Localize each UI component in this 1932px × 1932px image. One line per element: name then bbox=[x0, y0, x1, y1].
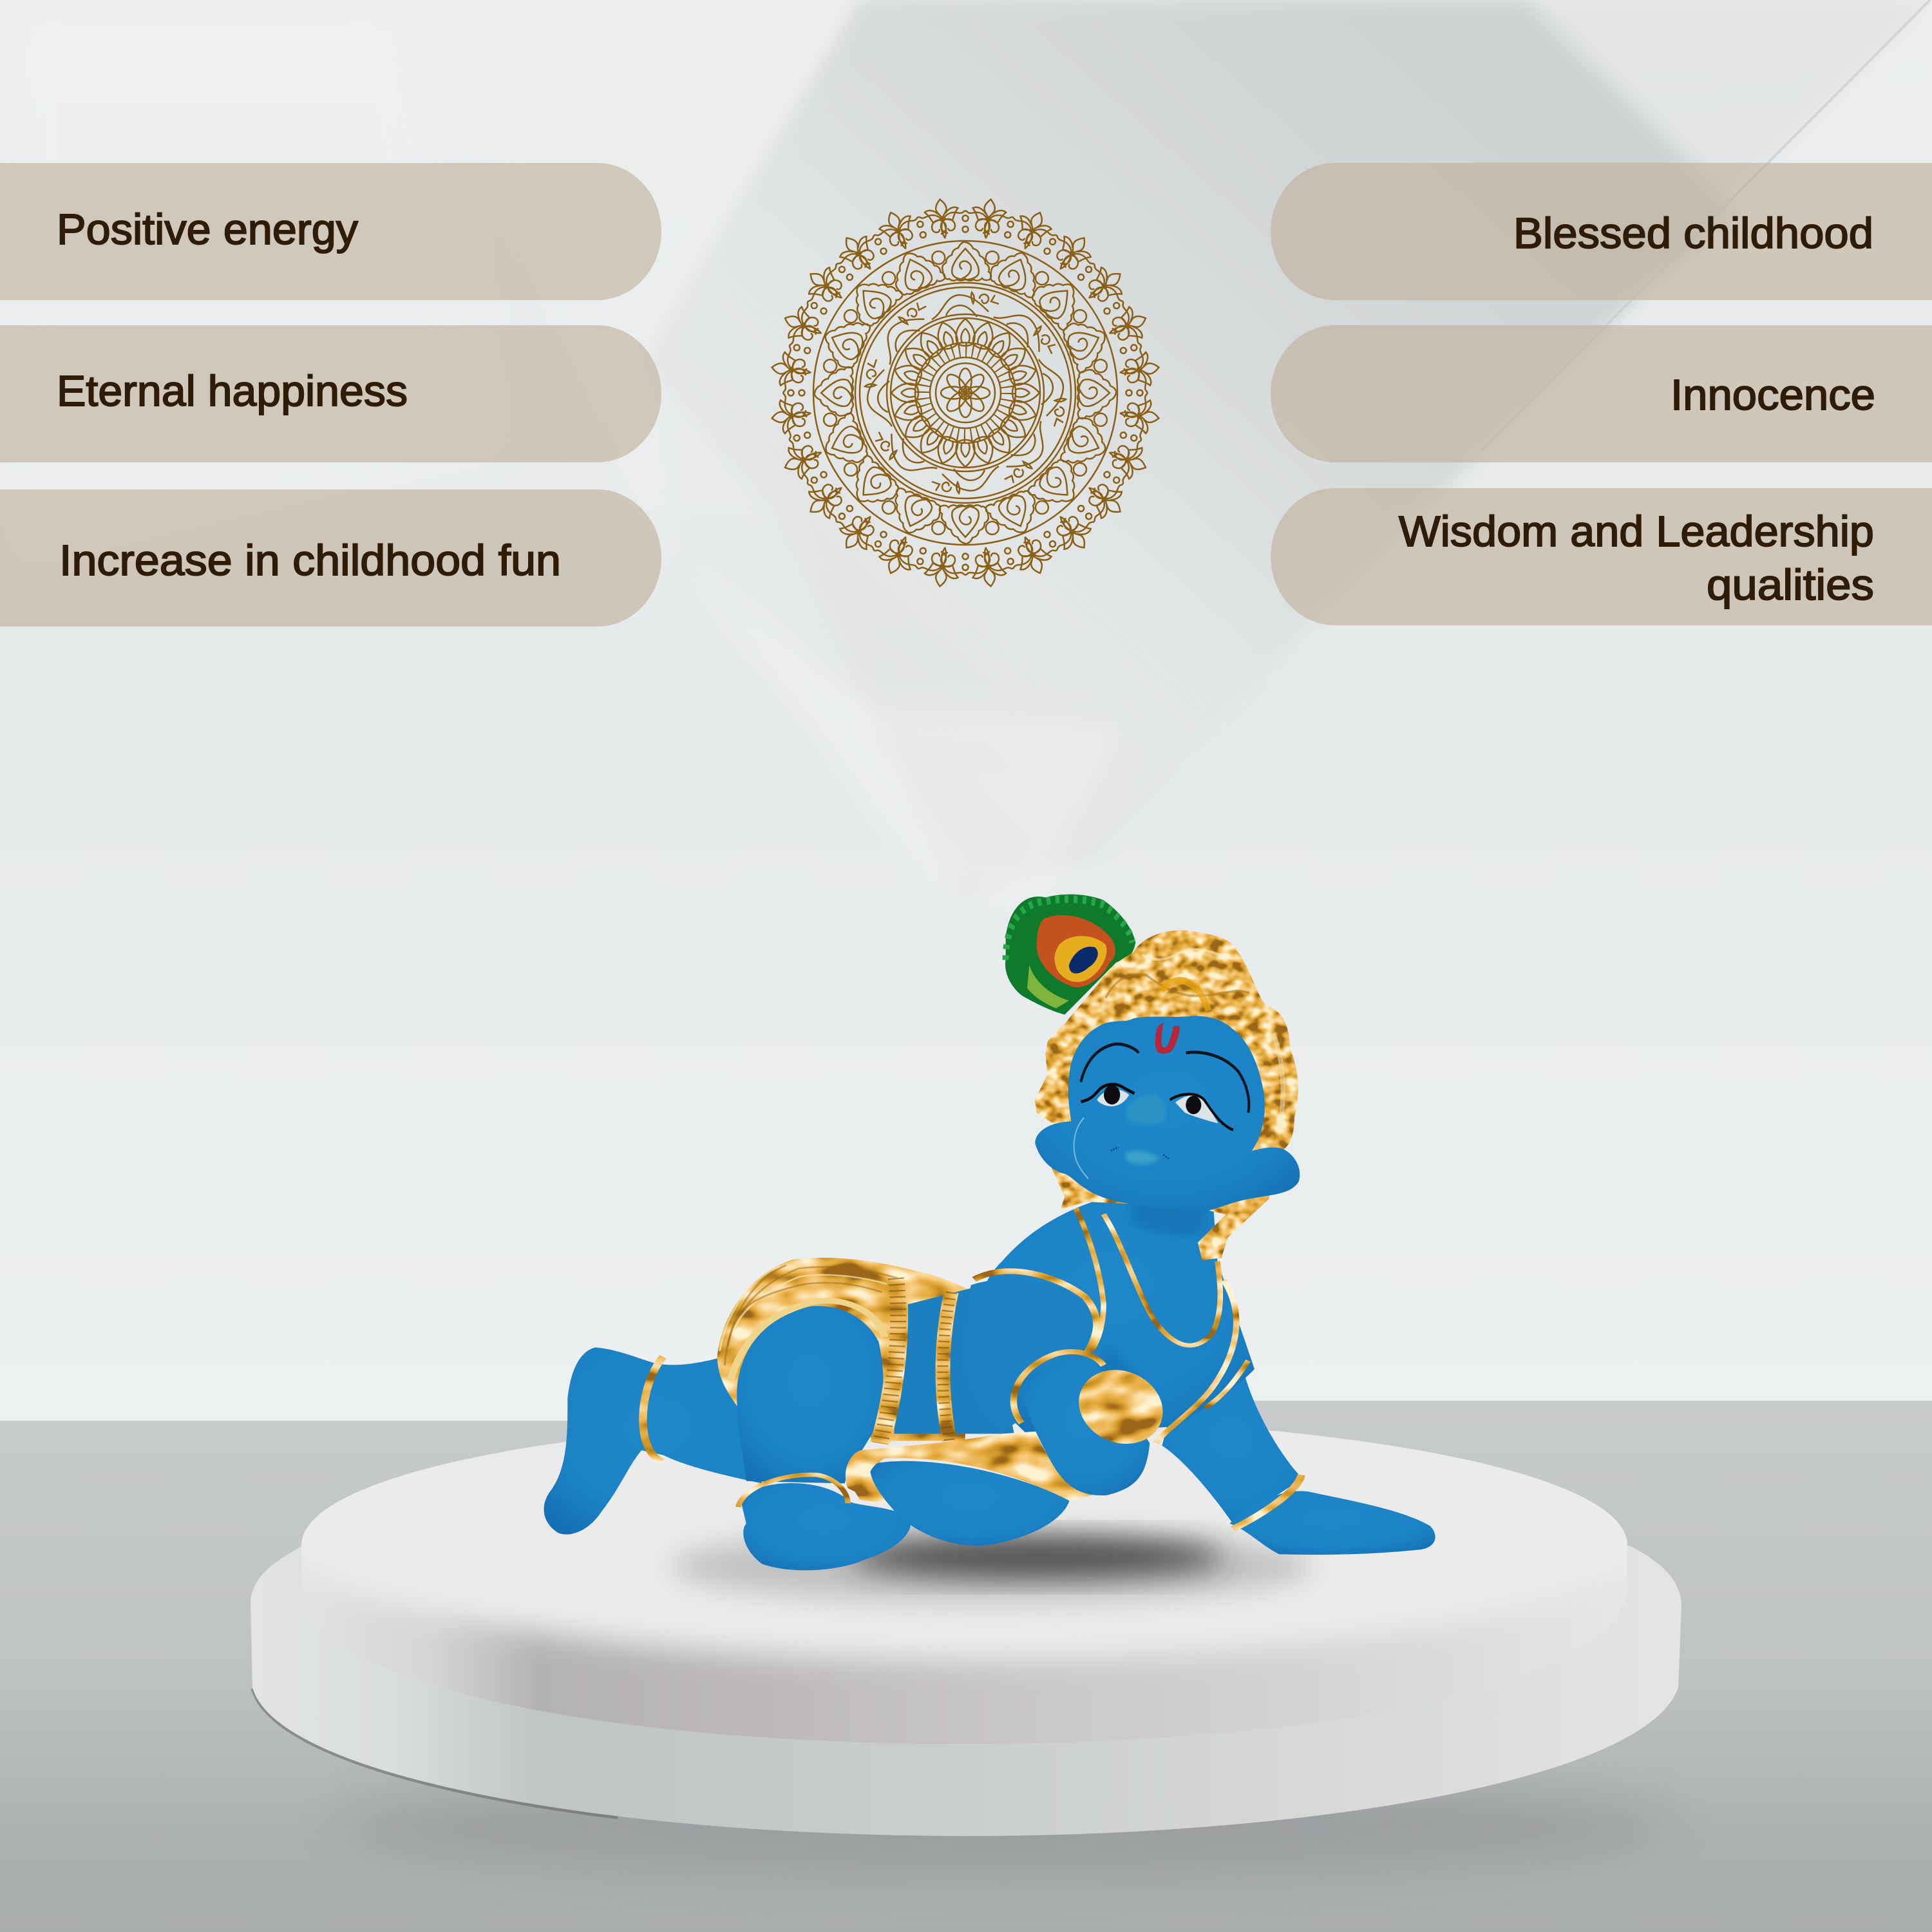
figure shadow bbox=[670, 1531, 1314, 1602]
contact shadow under figure bbox=[850, 1537, 1224, 1578]
label: Increase in childhood fun bbox=[59, 536, 561, 585]
belly bbox=[869, 1461, 1070, 1546]
label: Wisdom and Leadership bbox=[1399, 507, 1874, 556]
rear anklet bbox=[643, 1357, 663, 1462]
front foot bbox=[740, 1483, 911, 1570]
gold behind belly bbox=[840, 1457, 897, 1504]
rope twist marks bbox=[880, 1278, 951, 1443]
label line 2: qualities bbox=[1707, 561, 1874, 609]
label: Eternal happiness bbox=[57, 367, 408, 415]
upper arm bbox=[965, 1278, 1094, 1432]
jewellery straps and necklace bbox=[974, 1209, 1248, 1443]
background: wall bbox=[0, 0, 1932, 1423]
label: Positive energy bbox=[57, 205, 359, 254]
panel: benefit Positive energy bbox=[0, 163, 661, 300]
turban folds bbox=[1106, 949, 1283, 1130]
figure: crawling baby Krishna bbox=[544, 895, 1435, 1570]
gold turban and hair bbox=[1035, 930, 1298, 1260]
head bbox=[1005, 895, 1300, 1260]
rear leg and foot bbox=[544, 1347, 774, 1535]
nose bbox=[1125, 1094, 1166, 1124]
front anklet bbox=[738, 1475, 848, 1507]
contact line of lower tier bbox=[252, 1689, 966, 1837]
pill bbox=[0, 163, 661, 300]
pill bbox=[0, 325, 661, 462]
pill bbox=[1271, 488, 1932, 625]
torso and neck bbox=[969, 1181, 1255, 1434]
ear crease bbox=[1074, 1118, 1088, 1179]
wrist bracelet bbox=[1014, 1352, 1104, 1423]
waist bbox=[894, 1285, 1014, 1434]
dhoti cloth bbox=[717, 1258, 974, 1441]
lower tier of platform bbox=[251, 1546, 1681, 1836]
supporting bracelet bbox=[1233, 1475, 1302, 1529]
butter ball bbox=[1065, 1360, 1177, 1454]
panel: benefit Wisdom and Leadership qualities bbox=[1271, 488, 1932, 625]
dhoti ruffles bbox=[720, 1265, 897, 1379]
pill bbox=[0, 489, 661, 627]
right eye bbox=[1170, 1094, 1233, 1130]
left eye bbox=[1081, 1084, 1135, 1106]
body shading bbox=[1070, 1200, 1205, 1432]
pill bbox=[1271, 325, 1932, 462]
pill bbox=[1271, 163, 1932, 300]
icon: gold mandala bbox=[770, 197, 1161, 589]
waistband and ropes bbox=[846, 1278, 1097, 1502]
forearm and hand bbox=[1020, 1363, 1150, 1495]
floor bbox=[0, 1401, 1932, 1932]
lips bbox=[1125, 1151, 1159, 1164]
tilak bbox=[1155, 1022, 1180, 1054]
upper tier of platform bbox=[301, 1423, 1627, 1744]
panel: benefit Innocence bbox=[1271, 325, 1932, 462]
body bbox=[544, 1181, 1435, 1570]
supporting hand bbox=[1230, 1491, 1435, 1555]
panel: platform bbox=[251, 1396, 1681, 1871]
panel: benefit Increase in childhood fun bbox=[0, 489, 661, 627]
label: Innocence bbox=[1671, 371, 1875, 419]
label: Blessed childhood bbox=[1513, 209, 1873, 258]
mouth corner marks bbox=[1111, 1147, 1170, 1160]
front thigh bbox=[737, 1306, 884, 1483]
supporting arm bbox=[1162, 1377, 1303, 1524]
eyebrows bbox=[1081, 1044, 1249, 1113]
panel: benefit Blessed childhood bbox=[1271, 163, 1932, 300]
peacock feather bbox=[1005, 895, 1135, 1014]
panel: benefit Eternal happiness bbox=[0, 325, 661, 462]
face and ears bbox=[1035, 1016, 1300, 1213]
